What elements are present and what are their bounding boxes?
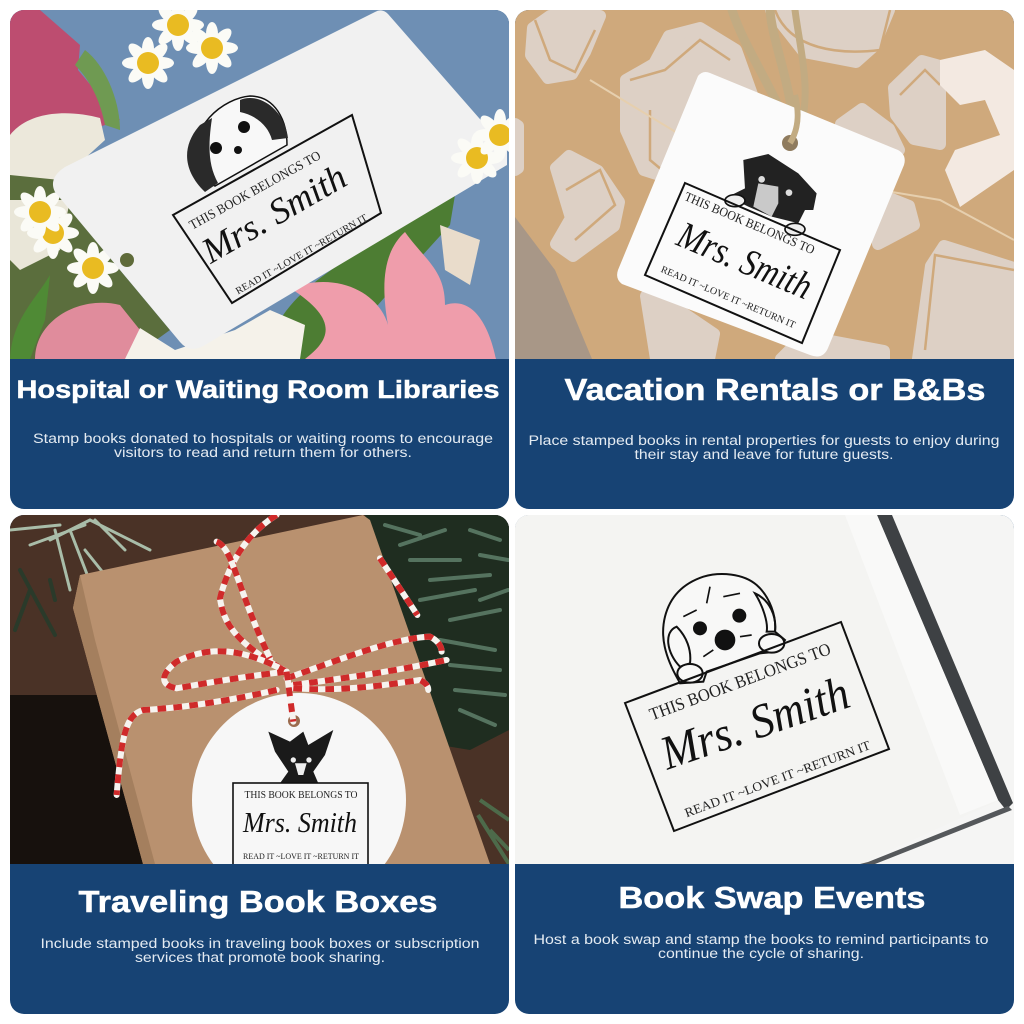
stamp: label: READ IT ~LOVE IT ~RETURN IT (243, 851, 360, 861)
body text: Place stamped books in rental properties for guests to enjoy during (528, 433, 1000, 448)
stamp: dog and label: THIS BOOK BELONGS TO (646, 639, 833, 724)
panel: hospital or waiting room libraries (10, 0, 526, 509)
panel: vacation rentals or B&Bs (515, 10, 1014, 509)
panel: book swap events (515, 515, 1014, 1014)
stamp: label: THIS BOOK BELONGS TO (244, 790, 358, 801)
square tag (617, 72, 905, 356)
stamp: dog and label: READ IT ~LOVE IT ~RETURN IT (659, 264, 797, 331)
photo: open book with stamp (515, 515, 1014, 864)
stamp: dog and label (645, 154, 840, 343)
white tag (53, 10, 507, 349)
heading: Book Swap Events (618, 880, 926, 915)
panel: vacation rentals or B&Bs: their stay and leave for future guests. (634, 447, 894, 462)
stamp: dog and label (173, 96, 381, 303)
stamp: dog and label: READ IT ~LOVE IT ~RETURN IT (234, 213, 369, 297)
photo: kraft box with square tag (515, 10, 1014, 359)
photo: flowers with white tag (10, 0, 526, 359)
stamp: dog and label: READ IT ~LOVE IT ~RETURN IT (682, 737, 872, 820)
round tag (192, 668, 406, 864)
twine (732, 10, 805, 135)
red and white twine (117, 515, 447, 795)
body text: Stamp books donated to hospitals or waiting rooms to encourage (33, 431, 493, 446)
panel: traveling book boxes: services that promote book sharing. (135, 950, 385, 965)
panel: traveling book boxes (10, 515, 509, 1014)
stamp: label (233, 783, 368, 873)
stamp: label: Mrs. Smith (242, 807, 357, 839)
stamp: dog and label: THIS BOOK BELONGS TO (186, 148, 323, 232)
stamp: dog and label: Mrs. Smith (670, 214, 818, 308)
stamp: dog and label: Mrs. Smith (194, 156, 353, 271)
photo: wrapped gift with round tag (10, 515, 509, 864)
heading: Traveling Book Boxes (78, 884, 438, 919)
body text: Include stamped books in traveling book boxes or subscription (40, 936, 480, 951)
heading: Vacation Rentals or B&Bs (564, 372, 986, 407)
heading: Hospital or Waiting Room Libraries (16, 376, 500, 404)
panel: hospital or waiting room libraries: visitors to read and return them for others. (114, 445, 412, 460)
stamp: dog and label: THIS BOOK BELONGS TO (682, 189, 817, 257)
panel: book swap events: continue the cycle of sharing. (658, 946, 864, 961)
stamp: dog and label: Mrs. Smith (653, 666, 856, 781)
dog illustration (663, 574, 785, 683)
stamp: dog and label (625, 574, 889, 831)
body text: Host a book swap and stamp the books to remind participants to (534, 932, 988, 947)
